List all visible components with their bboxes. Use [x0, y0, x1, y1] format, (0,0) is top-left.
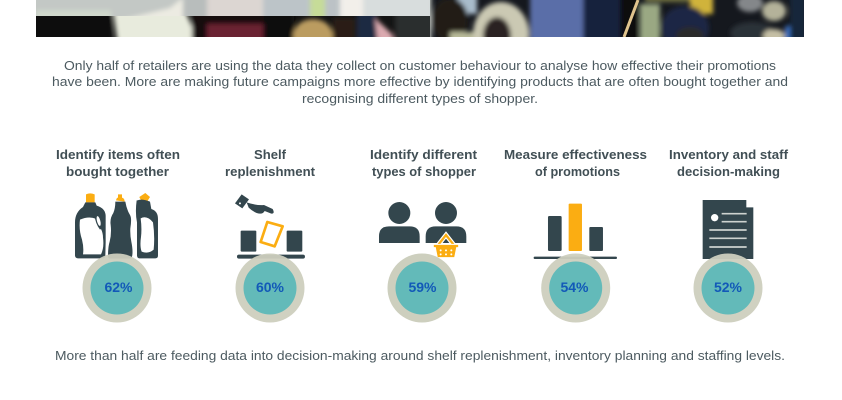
heading: identify items — [56, 147, 180, 179]
intro text block: have been. More are making future campaigns more effective by identifying products that are often bought together and — [52, 74, 788, 89]
panel: inventory and staff decision-making — [669, 147, 789, 322]
intro text block: recognising different types of shopper. — [302, 91, 538, 106]
heading: inventory and staff: decision-making — [677, 164, 780, 179]
heading: types of shopper — [370, 147, 478, 179]
percentage badge: 54% — [541, 254, 610, 322]
icon: bar chart — [534, 204, 617, 259]
percentage badge: 52% — [694, 254, 762, 322]
intro text block — [52, 58, 788, 106]
heading: types of shopper: Identify different — [370, 147, 478, 162]
percentage badge: 54%: 54% — [560, 279, 589, 295]
heading: measure effectiveness — [504, 147, 647, 179]
photo strip: crowd of shoppers — [36, 0, 804, 37]
heading: inventory and staff — [669, 147, 789, 179]
percentage badge: 59%: 59% — [408, 279, 437, 295]
icon: two shoppers with basket — [379, 202, 466, 258]
icon: document — [703, 200, 753, 259]
panel: measure effectiveness of promotions — [504, 147, 647, 322]
intro text block: Only half of retailers are using the data they collect on customer behaviour to analyse how effective their promotions — [64, 58, 777, 73]
heading: measure effectiveness: Measure effectiveness — [504, 147, 647, 162]
icon: three bottles — [75, 193, 158, 259]
heading: measure effectiveness: of promotions — [535, 164, 620, 179]
percentage badge: 52%: 52% — [714, 279, 743, 295]
percentage badge: 62% — [82, 254, 152, 322]
percentage badge: 60% — [236, 254, 304, 322]
heading: identify items: bought together — [66, 164, 169, 179]
icon: hand placing product on shelf — [235, 194, 305, 259]
panel: identify different types of shopper — [370, 147, 478, 322]
heading: shelf replenishment — [225, 147, 316, 179]
heading: types of shopper: types of shopper — [372, 164, 476, 179]
panel: identify items often bought together — [56, 147, 180, 322]
percentage badge: 60%: 60% — [256, 279, 285, 295]
heading: shelf replenishment: replenishment — [225, 164, 316, 179]
panel: shelf replenishment — [225, 147, 316, 322]
percentage badge: 59% — [388, 254, 456, 322]
heading: inventory and staff: Inventory and staff — [669, 147, 789, 162]
closing text: More than half are feeding data into decision-making around shelf replenishment, inventory planning and staffing levels. — [55, 348, 785, 363]
heading: identify items: Identify items often — [56, 147, 180, 162]
percentage badge: 62%: 62% — [104, 279, 133, 295]
heading: shelf replenishment: Shelf — [254, 147, 287, 162]
